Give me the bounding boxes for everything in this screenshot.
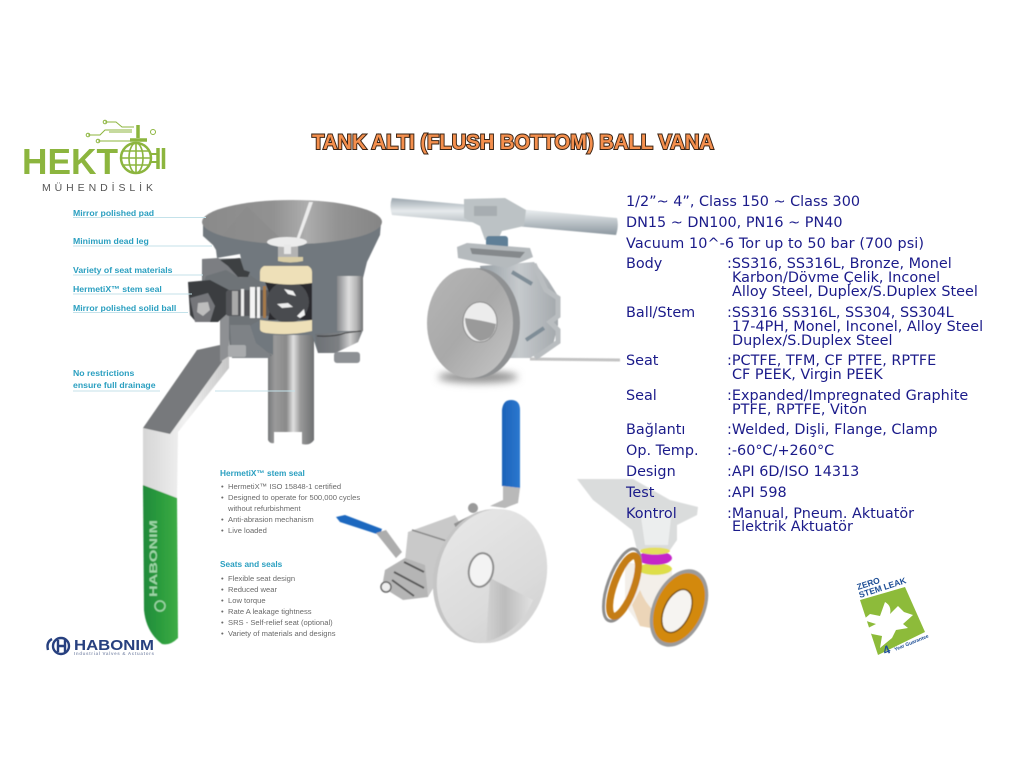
- badge guarantee: [881, 633, 930, 658]
- text block: seats and seals: Variety of materials and designs: [228, 629, 336, 638]
- text block: seats and seals: Flexible seat design: [228, 574, 295, 583]
- bottom nut: [334, 352, 360, 363]
- upper handle steel: [490, 486, 520, 508]
- stem: [486, 236, 508, 252]
- badge green square: [860, 587, 925, 655]
- text block: HermetiX stem seal: •: [221, 526, 224, 535]
- spec: operating temperature: [626, 443, 834, 459]
- text block: HermetiX stem seal: HermetiX™ ISO 15848-1 certified: [228, 482, 341, 491]
- size lines: Vacuum 10^-6 Tor up to 50 bar (700 psi): [626, 236, 924, 252]
- badge guarantee: Year Guarantee: [894, 633, 930, 653]
- logo wordmark HEK: HEKT: [22, 141, 118, 182]
- spec list: [625, 194, 983, 535]
- spec: design: [626, 464, 859, 480]
- spec: ball/stem: 17-4PH, Monel, Inconel, Alloy Steel: [732, 319, 983, 335]
- text block: seats and seals: •: [221, 607, 224, 616]
- lower nut left: [228, 345, 246, 357]
- mounting plate: [457, 243, 533, 268]
- text block: HermetiX stem seal: Live loaded: [228, 526, 267, 535]
- floor shadow: [438, 371, 518, 383]
- handle: green grip: [143, 485, 178, 644]
- upper seat ring: [260, 266, 312, 285]
- logo: Habonim: Industrial Valves & Actuators: [74, 651, 154, 656]
- cutaway valve with lever handle: [143, 200, 382, 644]
- callout: solid ball: Mirror polished solid ball: [73, 303, 176, 313]
- spec: body: [626, 256, 978, 300]
- callout labels for cutaway: [73, 208, 295, 391]
- callout: mirror polished pad: [73, 208, 206, 218]
- bracket backing: [202, 258, 272, 356]
- callout: stem seal: HermetiX™ stem seal: [73, 284, 162, 294]
- text block: HermetiX stem seal: Anti-abrasion mechanism: [228, 515, 314, 524]
- icon: globe valve: [86, 120, 164, 173]
- text block: seats and seals: Low torque: [228, 596, 266, 605]
- ball body: [625, 562, 674, 632]
- spec: test: :API 598: [727, 485, 787, 501]
- spec: control: Elektrik Aktuatör: [732, 519, 853, 535]
- text block: seats and seals: •: [221, 629, 224, 638]
- pad disc: [421, 496, 563, 656]
- threaded end connector: [381, 558, 428, 600]
- spec: body: Alloy Steel, Duplex/S.Duplex Steel: [732, 284, 978, 300]
- outlet pipe: [268, 335, 314, 444]
- text block: HermetiX stem seal: [220, 468, 360, 535]
- logo: HEKTO Mühendislik: [22, 120, 164, 194]
- pad cone facet: [486, 578, 533, 642]
- spec: seat: Seat: [626, 353, 659, 369]
- bore: [463, 302, 497, 342]
- spec: body: Karbon/Dövme Çelik, Inconel: [732, 270, 940, 286]
- spec: test: Test: [625, 485, 655, 501]
- badge: zero stem leak: [856, 575, 930, 658]
- spec: seat: :PCTFE, TFM, CF PTFE, RPTFE: [727, 353, 936, 369]
- spec: body: :SS316, SS316L, Bronze, Monel: [727, 256, 952, 272]
- text block: HermetiX stem seal: HermetiX™ stem seal: [220, 468, 305, 478]
- body: [480, 262, 558, 358]
- tube handle: [390, 198, 618, 235]
- callout: mirror polished pad: Mirror polished pad: [73, 208, 154, 218]
- right body cylinder: [337, 276, 363, 331]
- body section: [203, 223, 381, 355]
- logo: Habonim: [48, 637, 154, 656]
- top fitting: [468, 503, 478, 513]
- callout: full drainage: No restrictions: [73, 368, 134, 378]
- stem seal stack: [226, 286, 272, 318]
- callout: full drainage: ensure full drainage: [73, 380, 156, 390]
- lower handle steel: [376, 530, 402, 558]
- spec: operating temperature: Op. Temp.: [626, 443, 699, 459]
- bracket vertical plate: [220, 308, 229, 362]
- handle: green grip: HABONIM: [148, 520, 160, 597]
- bore: [466, 551, 496, 589]
- text block: seats and seals: •: [221, 596, 224, 605]
- spec: body: Body: [626, 256, 663, 272]
- text block: seats and seals: Reduced wear: [228, 585, 277, 594]
- spec: seat: [626, 353, 936, 383]
- size lines: [626, 194, 924, 252]
- left flange: [596, 545, 648, 625]
- solid ball: [265, 281, 312, 323]
- spec: seal: Seal: [626, 388, 657, 404]
- lower body band: [315, 331, 362, 353]
- text block: HermetiX stem seal: without refurbishment: [227, 504, 301, 513]
- valve photo: wrench-handle flush valve: [390, 198, 620, 383]
- right flange: [638, 560, 720, 656]
- spec: test: [625, 485, 787, 501]
- flange disc: [427, 268, 513, 378]
- flange disc edge: [434, 268, 520, 378]
- spec: seal: [626, 388, 968, 418]
- text block: seats and seals: Rate A leakage tightness: [228, 607, 312, 616]
- badge heading: ZERO: [856, 575, 881, 592]
- spec: ball/stem: :SS316 SS316L, SS304, SS304L: [727, 305, 954, 321]
- text block: seats and seals: [220, 559, 336, 638]
- badge heading: STEM LEAK: [858, 575, 908, 600]
- lower seat ring: [260, 320, 312, 334]
- title: TANK ALTI (FLUSH BOTTOM) BALL VANA: [312, 131, 714, 154]
- stem rings: [638, 548, 672, 575]
- spec: ball/stem: [626, 305, 983, 349]
- valve photo: blue-handled valve with flush pad: [336, 400, 563, 656]
- handle: steel lever: [143, 345, 229, 498]
- text block: HermetiX stem seal: •: [221, 493, 224, 502]
- spec: ball/stem: Duplex/S.Duplex Steel: [732, 333, 893, 349]
- text block: HermetiX stem seal: •: [221, 515, 224, 524]
- spec: design: Design: [626, 464, 676, 480]
- spec: connection: [626, 422, 937, 438]
- blue handle upper: [502, 400, 520, 488]
- translucent handle: [577, 479, 698, 550]
- handle hub: [464, 198, 526, 240]
- spec: control: [626, 506, 914, 535]
- text block: seats and seals: SRS - Self-relief seat (optional): [228, 618, 333, 627]
- spec: ball/stem: Ball/Stem: [626, 305, 695, 321]
- spec: connection: Bağlantı: [626, 422, 685, 438]
- text block: HermetiX stem seal: Designed to operate for 500,000 cycles: [228, 493, 360, 502]
- callout: minimum dead leg: [73, 236, 212, 246]
- left lower flange: [230, 325, 270, 358]
- size lines: 1/2”~ 4”, Class 150 ~ Class 300: [626, 194, 860, 210]
- badge guarantee: 4: [881, 642, 893, 658]
- icon: white leaf: [863, 602, 913, 648]
- left actuator bracket: [202, 258, 250, 284]
- bore highlight: [267, 237, 307, 258]
- body: [405, 515, 464, 597]
- pad edge: [417, 496, 559, 656]
- spec: connection: :Welded, Dişli, Flange, Clamp: [727, 422, 937, 438]
- spec: seal: PTFE, RPTFE, Viton: [732, 402, 867, 418]
- spec: seat: CF PEEK, Virgin PEEK: [732, 367, 883, 383]
- stem highlight: [640, 510, 672, 545]
- cutaway render: colored seat valve: [577, 479, 720, 656]
- stem nut: [188, 280, 229, 322]
- spec: seal: :Expanded/Impregnated Graphite: [727, 388, 968, 404]
- mirror polished funnel pad: [202, 200, 382, 244]
- callout: minimum dead leg: Minimum dead leg: [73, 236, 149, 246]
- logo subtitle: MÜHENDİSLİK: [42, 181, 153, 194]
- size lines: DN15 ~ DN100, PN16 ~ PN40: [626, 215, 843, 231]
- spec: design: :API 6D/ISO 14313: [727, 464, 859, 480]
- icon: Habonim emblem: [48, 638, 69, 654]
- callout: seat materials: Variety of seat materials: [73, 265, 173, 275]
- text block: seats and seals: •: [221, 618, 224, 627]
- text block: HermetiX stem seal: •: [221, 482, 224, 491]
- logo: Habonim: HABONIM: [74, 637, 154, 654]
- text block: seats and seals: •: [221, 574, 224, 583]
- callout: full drainage: [73, 368, 295, 391]
- text block: seats and seals: Seats and seals: [220, 559, 283, 569]
- text block: seats and seals: •: [221, 585, 224, 594]
- spec: control: :Manual, Pneum. Aktuatör: [727, 506, 914, 522]
- blue handle lower: [336, 515, 382, 535]
- spec: operating temperature: :-60°C/+260°C: [727, 443, 834, 459]
- spec: control: Kontrol: [626, 506, 677, 522]
